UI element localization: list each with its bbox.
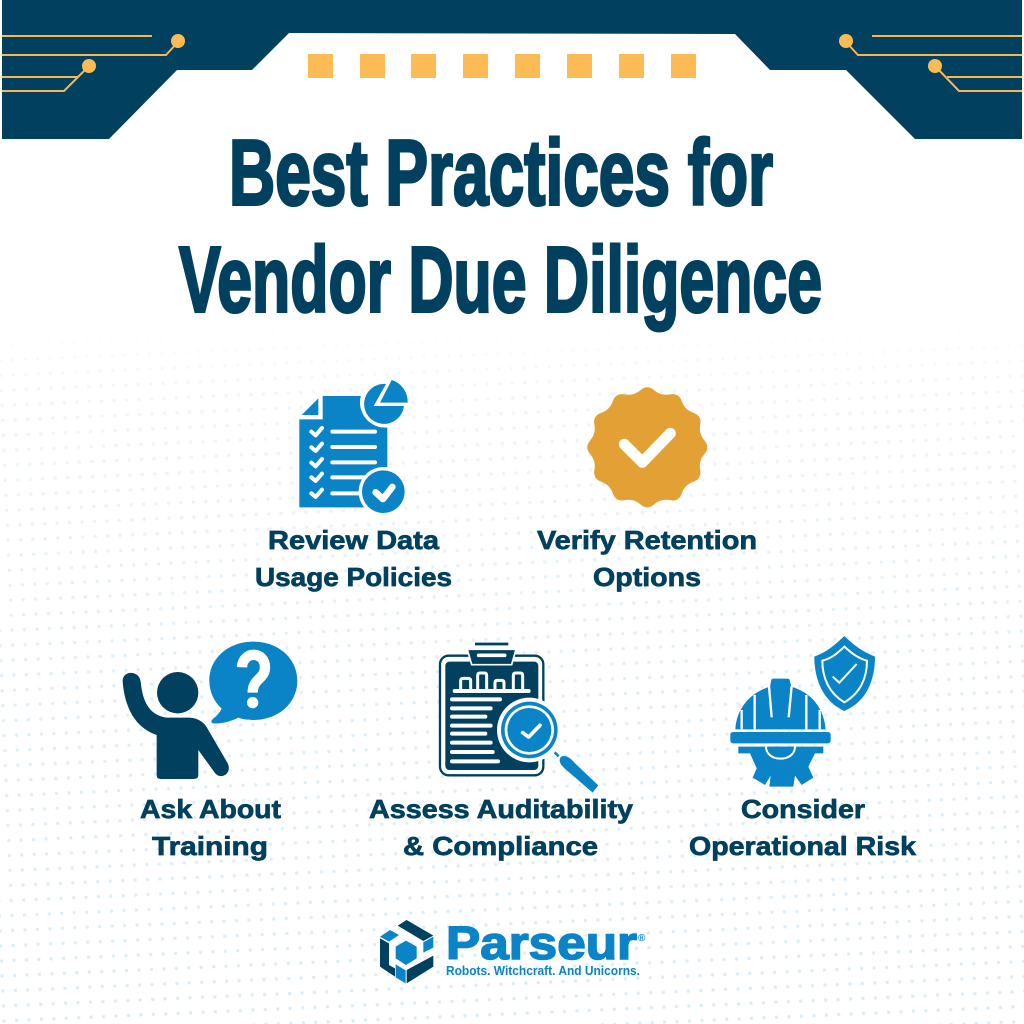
title: Best Practices for xyxy=(229,120,773,224)
label xyxy=(255,525,452,592)
icon: clipboard with magnifier xyxy=(440,644,598,793)
label: Usage Policies xyxy=(255,562,452,592)
left circuit traces xyxy=(2,34,185,91)
registered mark: ® xyxy=(638,933,646,944)
label xyxy=(140,794,281,861)
logo mark xyxy=(380,920,433,983)
item: review data usage policies xyxy=(255,377,452,592)
item: assess auditability and compliance xyxy=(369,644,634,861)
label: Review Data xyxy=(268,525,440,555)
header banner xyxy=(2,0,1022,139)
icon: hard hat with gear and shield xyxy=(730,636,875,787)
label: Ask About xyxy=(140,794,281,824)
label: Consider xyxy=(741,794,865,824)
item: consider operational risk xyxy=(689,636,917,861)
item: ask about training xyxy=(123,642,297,861)
label xyxy=(537,525,757,592)
label: Training xyxy=(152,831,268,861)
title xyxy=(179,120,822,332)
icon: document with checklist xyxy=(299,377,411,516)
banner shape xyxy=(2,0,1022,139)
wordmark: Parseur xyxy=(446,917,637,969)
item: verify retention options xyxy=(537,387,757,592)
logo: Parseur xyxy=(380,917,646,983)
row of orange squares xyxy=(308,54,696,78)
icon: badge with check xyxy=(587,387,707,507)
label: Assess Auditability xyxy=(369,794,634,824)
label xyxy=(689,794,917,861)
icon: person with question bubble xyxy=(123,642,297,779)
tagline: Robots. Witchcraft. And Unicorns. xyxy=(446,964,640,978)
label: Options xyxy=(593,562,701,592)
label xyxy=(369,794,634,861)
right circuit traces xyxy=(839,34,1022,91)
label: & Compliance xyxy=(403,831,598,861)
label: Operational Risk xyxy=(689,831,917,861)
label: Verify Retention xyxy=(537,525,757,555)
